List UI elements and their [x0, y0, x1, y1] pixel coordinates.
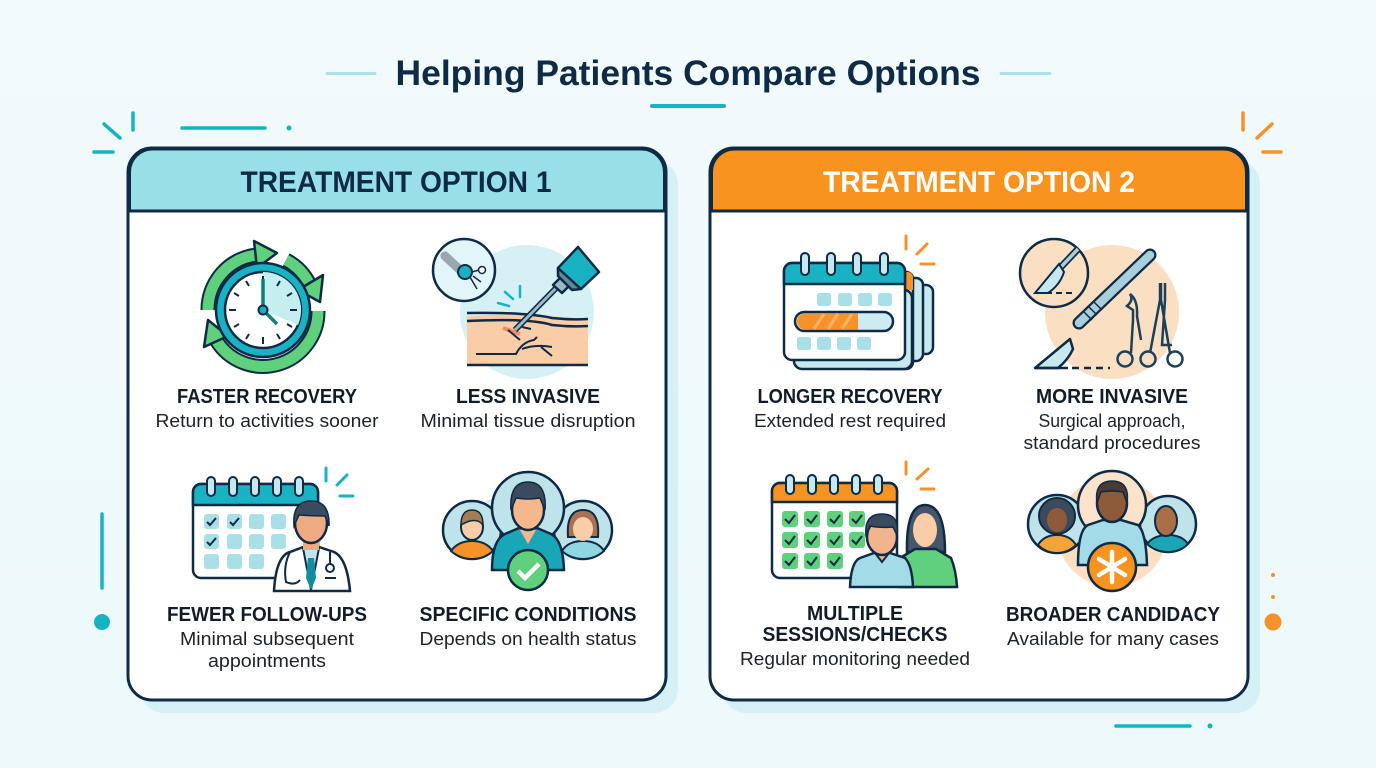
icon: patient group with check	[443, 472, 612, 590]
panel 1 header	[130, 149, 664, 211]
label: less invasive: LESS INVASIVE	[456, 386, 600, 408]
icon: calendar with two patients	[772, 462, 957, 587]
icon: clock with green arrows	[204, 241, 323, 366]
label: fewer follow-ups: Minimal subsequent	[180, 628, 354, 649]
label: faster recovery	[156, 386, 378, 431]
label: multiple sessions/checks: SESSIONS/CHECKS	[762, 624, 948, 646]
label: longer recovery	[754, 386, 946, 431]
label: less invasive: Minimal tissue disruption	[420, 410, 636, 431]
icon: minimally invasive probe	[433, 239, 599, 379]
decoration: bottom line	[1116, 724, 1212, 728]
panel: treatment option 1	[128, 148, 678, 713]
label: multiple sessions/checks: MULTIPLE	[807, 603, 903, 625]
label: specific conditions	[420, 604, 636, 649]
label: fewer follow-ups: appointments	[208, 650, 326, 671]
label: broader candidacy: Available for many cases	[1007, 628, 1219, 649]
label: more invasive	[1024, 386, 1200, 453]
label: specific conditions: SPECIFIC CONDITIONS	[420, 604, 636, 626]
panel 1 header: TREATMENT OPTION 1	[240, 166, 552, 199]
panel 2 header: TREATMENT OPTION 2	[823, 166, 1135, 199]
label: more invasive: Surgical approach,	[1038, 410, 1186, 431]
label: multiple sessions/checks: Regular monitoring needed	[740, 648, 970, 669]
label: multiple sessions/checks	[740, 603, 970, 669]
label: more invasive: standard procedures	[1024, 432, 1200, 453]
title: Helping Patients Compare Options	[396, 54, 981, 93]
label: broader candidacy	[1006, 604, 1221, 649]
decoration: right dots	[1264, 573, 1282, 630]
label: broader candidacy: BROADER CANDIDACY	[1006, 604, 1221, 626]
label: faster recovery: FASTER RECOVERY	[177, 386, 358, 408]
label: less invasive	[420, 386, 636, 431]
label: longer recovery: LONGER RECOVERY	[758, 386, 943, 408]
label: fewer follow-ups	[167, 604, 367, 671]
icon: scalpel and scissors	[1020, 239, 1182, 379]
decoration: left line and dot	[94, 514, 110, 630]
decoration: left sparks	[94, 113, 292, 152]
label: more invasive: MORE INVASIVE	[1036, 386, 1188, 408]
panel: treatment option 2	[710, 148, 1260, 713]
label: longer recovery: Extended rest required	[754, 410, 946, 431]
icon: broad patient group with asterisk	[1028, 471, 1196, 591]
decoration: right sparks	[1243, 113, 1281, 152]
icon: calendar with progress bar	[784, 236, 934, 369]
icon: calendar with doctor	[193, 468, 353, 591]
label: fewer follow-ups: FEWER FOLLOW-UPS	[167, 604, 367, 626]
panel 2 header	[712, 149, 1246, 211]
label: faster recovery: Return to activities sooner	[156, 410, 378, 431]
label: specific conditions: Depends on health status	[420, 628, 636, 649]
